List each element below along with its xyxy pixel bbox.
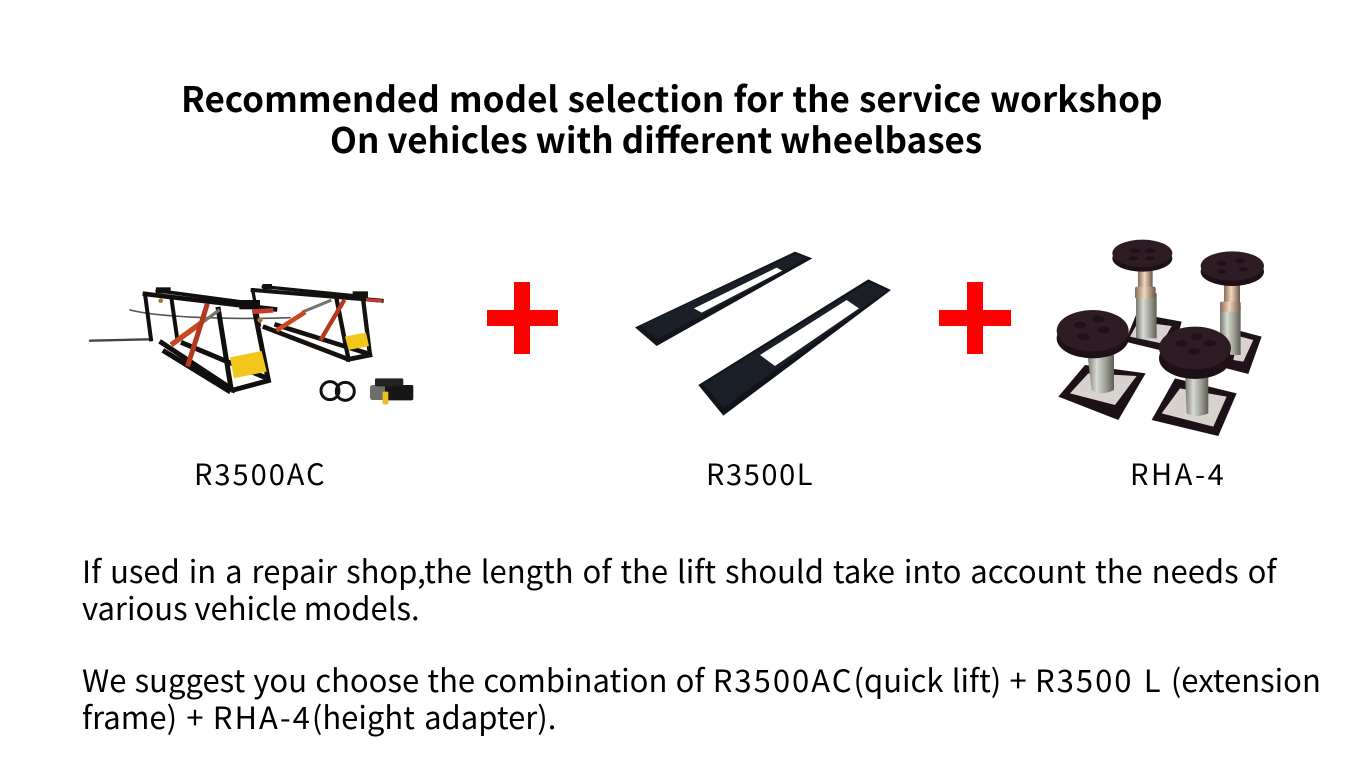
plus sign 1	[487, 282, 558, 354]
rear lift frame	[253, 284, 383, 359]
front lift frame	[145, 287, 275, 391]
hoses	[321, 382, 354, 400]
label: R3500L: R3500L	[706, 452, 814, 494]
paragraph: recommended combination	[82, 656, 1321, 738]
paragraph: recommended combination: frame) + RHA-4(height adapter).	[82, 693, 556, 738]
frame right	[698, 279, 891, 416]
title: Recommended model selection for the service workshop	[181, 72, 1163, 123]
paragraph: repair shop note: If used in a repair shop,the length of the lift should take into account the needs of	[82, 547, 1276, 592]
adapter front left	[1057, 310, 1146, 420]
adapter back right	[1201, 251, 1264, 374]
adapter front right	[1152, 327, 1237, 436]
cables	[90, 310, 290, 341]
paragraph: recommended combination: We suggest you choose the combination of R3500AC(quick lift) + R3500 L (extension	[82, 656, 1321, 701]
image: R3500AC quick lift	[90, 284, 413, 404]
frame left	[635, 252, 812, 346]
image: R3500L extension frames	[635, 252, 891, 416]
paragraph: repair shop note: various vehicle models.	[82, 584, 420, 629]
adapter back left	[1112, 240, 1182, 353]
hydraulic pump	[370, 378, 413, 404]
label: R3500AC: R3500AC	[194, 452, 327, 494]
label: RHA-4: RHA-4	[1130, 452, 1226, 494]
title	[181, 72, 1163, 164]
paragraph: repair shop note	[82, 547, 1278, 629]
plus sign 2	[939, 282, 1011, 354]
image: RHA-4 height adapters	[1057, 240, 1264, 436]
title: On vehicles with different wheelbases	[330, 113, 982, 164]
